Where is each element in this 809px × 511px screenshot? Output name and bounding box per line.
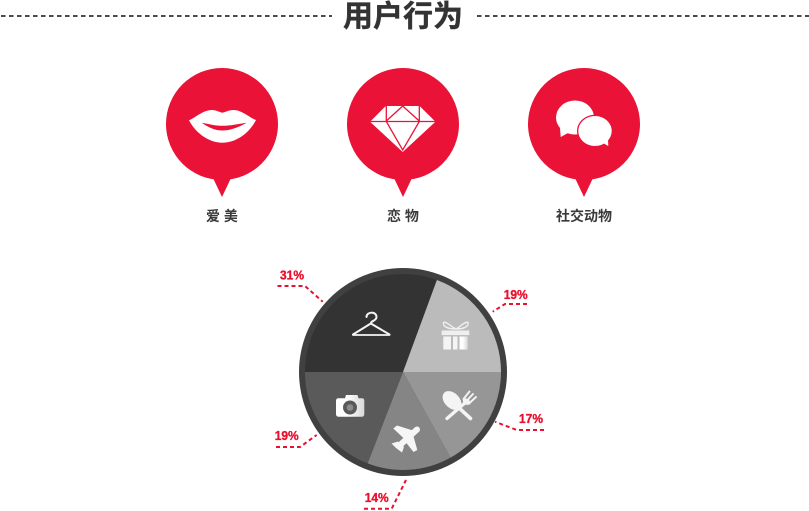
icon: airplane [392,426,417,452]
callout: 19% photography: 19% [275,429,299,443]
icon: lips [189,110,256,143]
callout: 14%: 14% [365,491,389,505]
callout: 14% [364,480,406,509]
heading: 用户行为: 用户行为 [343,0,463,34]
icon: speech bubbles [556,100,613,147]
pin: 社交动物 [528,68,640,224]
callout: 19% photography [275,429,317,447]
label: 爱美: 爱 美 [206,208,238,224]
icon: camera [336,395,364,417]
icon: gift [442,322,469,350]
icon: spoon and fork [439,387,476,418]
pin: 恋物 [347,68,459,224]
callout: 31% [278,268,323,302]
slice: 31% clothing [305,274,437,372]
slice: 17% dining [403,372,501,458]
pie chart [299,268,507,476]
callout: 19% gifts: 19% [504,288,528,302]
callout: 17% [495,412,544,430]
callout: 19% gifts [493,288,528,312]
slice: 19% photography [305,372,403,463]
pin: 爱美 [166,68,278,224]
slice: 14% travel [368,372,450,470]
label: 恋物: 恋 物 [387,208,419,224]
icon: diamond [370,105,436,152]
slice: 19% gifts [403,280,501,372]
callout: 31%: 31% [280,268,304,282]
label: 社交动物: 社交动物 [556,208,612,224]
icon: hanger [353,313,390,335]
callout: 17%: 17% [519,412,543,426]
